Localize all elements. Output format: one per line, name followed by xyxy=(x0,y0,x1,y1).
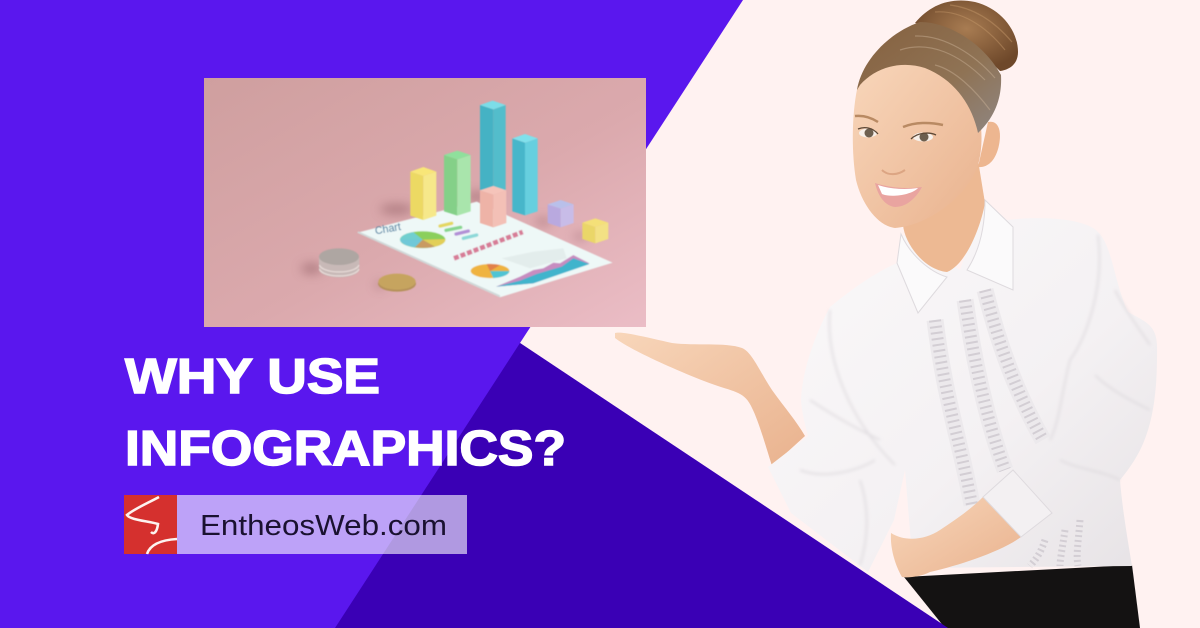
silver coin stack xyxy=(319,248,359,277)
bar: green xyxy=(444,151,471,216)
neck xyxy=(903,160,985,272)
cube: lilac xyxy=(548,200,574,227)
pie chart 2 xyxy=(471,264,509,278)
background: dark purple panel xyxy=(335,343,948,628)
object shadows xyxy=(301,192,587,288)
logo: red square xyxy=(124,495,177,554)
small table xyxy=(502,248,567,268)
bar: blue xyxy=(512,134,538,215)
hair xyxy=(857,22,1001,133)
ruffles xyxy=(935,290,1080,566)
face xyxy=(853,64,982,228)
shirt cuff xyxy=(983,470,1052,537)
gold coin xyxy=(378,274,416,292)
background: cream panel xyxy=(520,0,1200,628)
area chart xyxy=(496,255,589,287)
lower arm resting on hip xyxy=(891,497,1021,577)
woman presenting with open hand xyxy=(615,1,1157,628)
bar: yellow xyxy=(410,167,436,220)
title: INFOGRAPHICS? xyxy=(125,422,566,476)
brand badge xyxy=(124,495,467,554)
label text: EntheosWeb.com xyxy=(200,510,447,542)
cube: yellow xyxy=(582,218,608,243)
title xyxy=(125,350,566,476)
bar: pink xyxy=(480,186,506,227)
shirt folds xyxy=(800,235,1150,565)
photo: 3D bar chart on pink surface xyxy=(204,78,646,327)
title: WHY USE xyxy=(125,350,380,404)
collar xyxy=(897,200,1013,313)
skirt xyxy=(904,565,1140,628)
legend bars xyxy=(440,223,477,238)
chart paper: Chart xyxy=(374,221,402,238)
mini bars row xyxy=(454,232,523,258)
bar: tall blue xyxy=(480,101,506,194)
chart paper xyxy=(357,202,613,297)
raised arm and hand xyxy=(615,333,805,466)
hair bun xyxy=(915,1,1018,71)
ear xyxy=(978,122,1000,167)
facial features xyxy=(855,116,943,207)
label background xyxy=(177,495,467,554)
pie chart 1 xyxy=(400,231,445,248)
shirt xyxy=(768,200,1157,572)
